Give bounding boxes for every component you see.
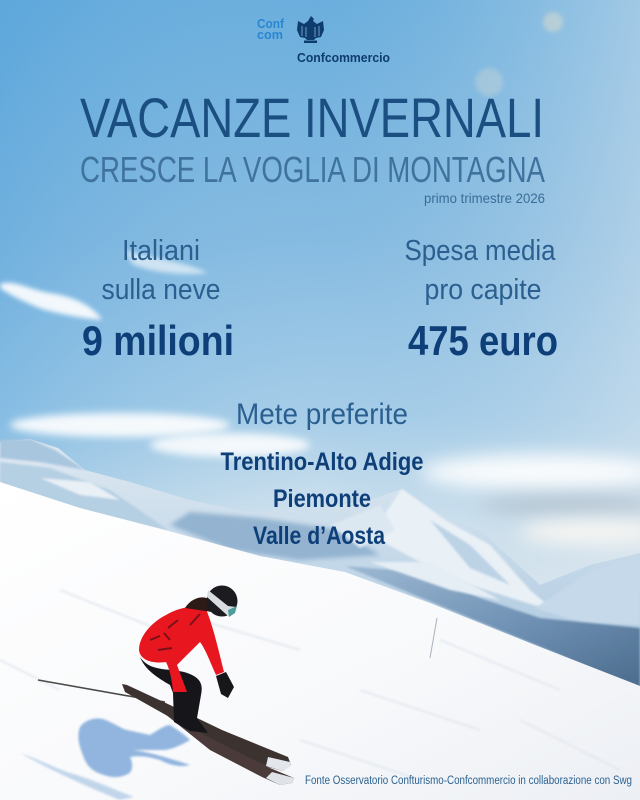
legs	[140, 657, 208, 733]
stat: Italiani sulla neve: 9 milioni	[82, 317, 234, 364]
logo mark: Conf com: com	[257, 27, 283, 42]
logo mark: Conf com: Conf	[257, 16, 285, 31]
ski slope	[0, 482, 640, 800]
stat: Italiani sulla neve: sulla neve	[102, 274, 220, 306]
stat: Italiani sulla neve: Italiani	[122, 235, 200, 267]
period label: primo trimestre 2026	[424, 190, 545, 206]
clouds	[0, 250, 640, 544]
mountains	[0, 439, 640, 700]
stat: Spesa media pro capite: 475 euro	[408, 317, 558, 364]
shadow streak	[20, 753, 134, 800]
helmet	[206, 586, 238, 616]
title: VACANZE INVERNALI	[80, 86, 544, 149]
stat: Spesa media pro capite: Spesa media	[404, 235, 556, 267]
list: destinations: Valle d’Aosta	[253, 522, 386, 550]
list: destinations	[220, 448, 424, 550]
logo wordmark: Confcommercio	[297, 51, 390, 65]
list: destinations: Piemonte	[273, 485, 371, 513]
stat: Spesa media pro capite	[404, 235, 558, 364]
icon: eagle emblem	[297, 16, 324, 43]
glove	[216, 672, 234, 698]
logo mark: Conf com	[257, 16, 285, 42]
jacket	[139, 606, 224, 692]
stat: Spesa media pro capite: pro capite	[424, 274, 542, 306]
logo: Confcommercio	[257, 16, 390, 65]
hair	[185, 597, 212, 612]
skis	[122, 684, 291, 771]
list: destinations: Trentino-Alto Adige	[220, 448, 424, 476]
skier	[20, 586, 294, 800]
heading: Mete preferite: Mete preferite	[236, 398, 408, 431]
pole	[38, 680, 165, 702]
stat: Italiani sulla neve	[82, 235, 234, 364]
shadow	[78, 718, 190, 777]
